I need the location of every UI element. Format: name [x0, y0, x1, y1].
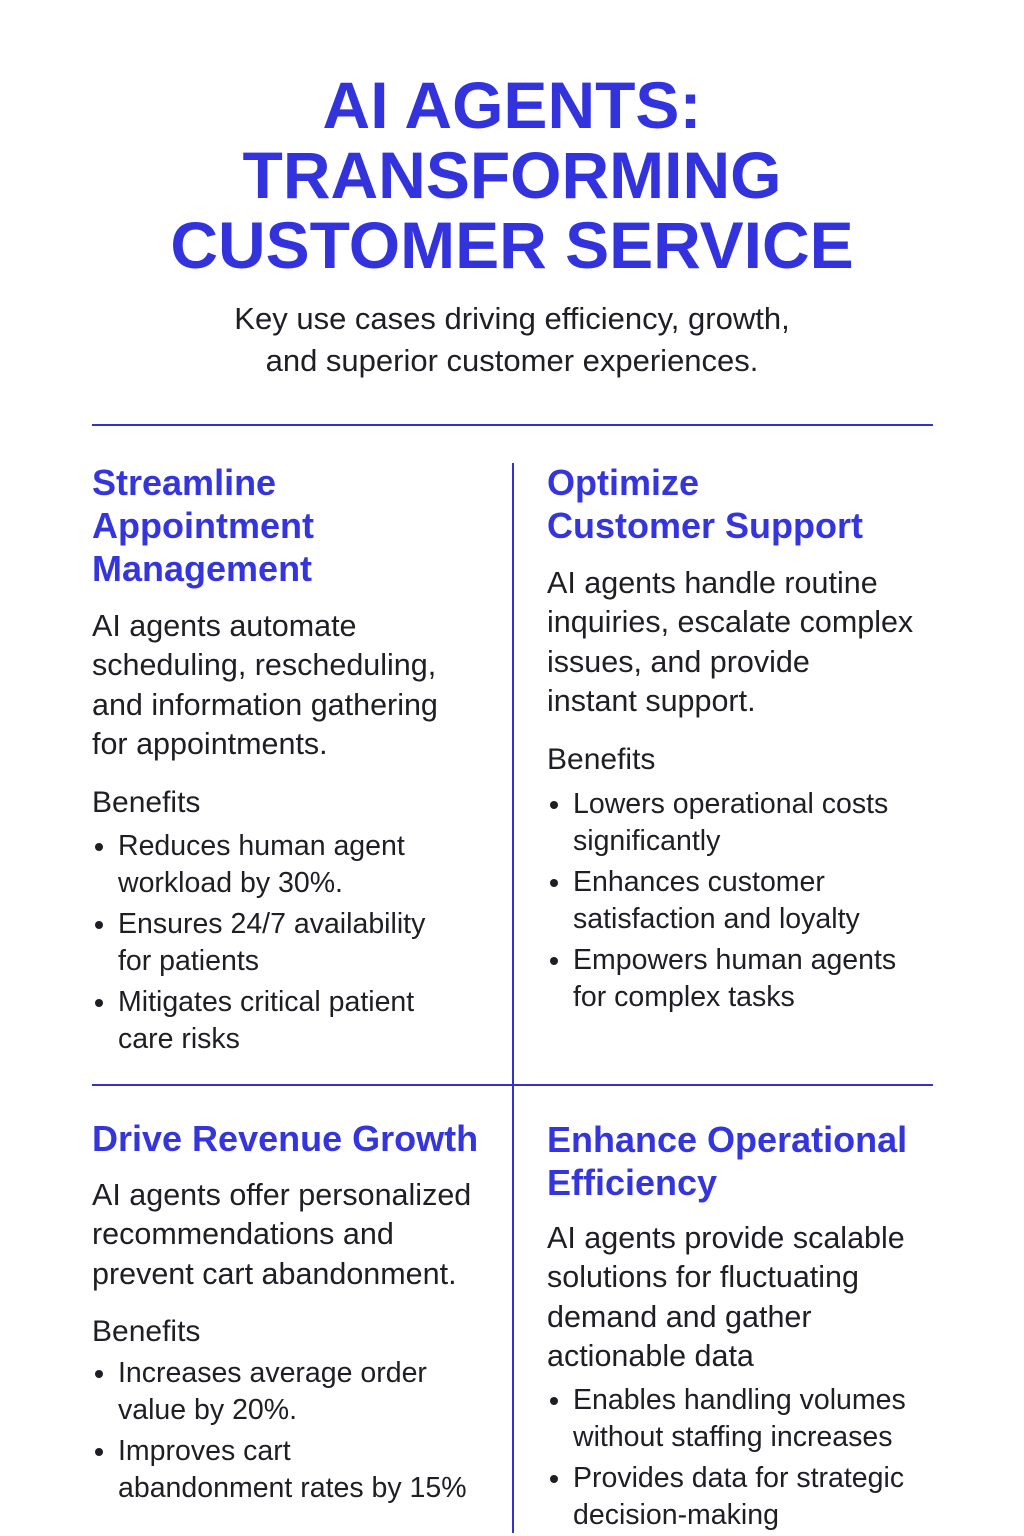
benefits list: Mitigates critical patient [118, 986, 414, 1018]
panel: operational efficiency [547, 1119, 907, 1530]
benefits list: decision-making [573, 1498, 779, 1530]
benefits list: Improves cart [118, 1435, 291, 1467]
subtitle: and superior customer experiences. [266, 343, 758, 378]
description: prevent cart abandonment. [92, 1257, 457, 1291]
heading: Management [92, 548, 312, 589]
heading [547, 462, 863, 546]
benefits list: Lowers operational costs [573, 788, 888, 820]
benefits list: value by 20%. [118, 1394, 297, 1426]
description: AI agents provide scalable [547, 1221, 905, 1255]
benefits list: for patients [118, 944, 259, 976]
heading: Customer Support [547, 505, 863, 546]
panel: appointment management [92, 462, 438, 1054]
benefits list: satisfaction and loyalty [573, 902, 860, 934]
benefits list: workload by 30%. [118, 866, 343, 898]
benefits list [95, 1357, 467, 1504]
benefits list: Empowers human agents [573, 944, 896, 976]
title [170, 68, 854, 282]
heading: Enhance Operational [547, 1119, 907, 1160]
description: inquiries, escalate complex [547, 605, 913, 639]
heading: Efficiency [547, 1162, 717, 1203]
description: and information gathering [92, 688, 438, 722]
benefits list: Reduces human agent [118, 830, 405, 862]
benefits label: Benefits [547, 743, 655, 776]
benefits list [550, 788, 896, 1012]
benefits list: Increases average order [118, 1357, 427, 1389]
heading: Drive Revenue Growth [92, 1118, 478, 1159]
subtitle: Key use cases driving efficiency, growth, [234, 301, 790, 336]
benefits list: care risks [118, 1022, 240, 1054]
description: AI agents handle routine [547, 566, 878, 600]
description: solutions for fluctuating [547, 1260, 859, 1294]
description [547, 566, 913, 718]
benefits list: Ensures 24/7 availability [118, 908, 425, 940]
subtitle [234, 301, 790, 378]
description [92, 1178, 471, 1291]
title: AI AGENTS: [323, 68, 701, 142]
panel: revenue growth [92, 1118, 478, 1504]
heading: Optimize [547, 462, 699, 503]
heading [547, 1119, 907, 1203]
heading: Streamline [92, 462, 276, 503]
benefits label: Benefits [92, 786, 200, 819]
description: instant support. [547, 684, 756, 718]
benefits list: Enhances customer [573, 866, 825, 898]
description: AI agents offer personalized [92, 1178, 471, 1212]
panel: customer support [547, 462, 913, 1012]
description [547, 1221, 905, 1373]
benefits list: Provides data for strategic [573, 1462, 904, 1494]
benefits list: significantly [573, 824, 720, 856]
benefits list: abandonment rates by 15% [118, 1472, 467, 1504]
description: for appointments. [92, 727, 328, 761]
benefits label: Benefits [92, 1315, 200, 1348]
description: issues, and provide [547, 645, 810, 679]
benefits list: for complex tasks [573, 980, 795, 1012]
benefits list [550, 1384, 906, 1530]
benefits list [95, 830, 426, 1054]
description: scheduling, rescheduling, [92, 648, 436, 682]
description: actionable data [547, 1339, 754, 1373]
title: TRANSFORMING [243, 138, 781, 212]
heading [92, 462, 314, 589]
description: demand and gather [547, 1300, 812, 1334]
benefits list: without staffing increases [573, 1420, 892, 1452]
description: recommendations and [92, 1217, 394, 1251]
benefits list: Enables handling volumes [573, 1384, 906, 1416]
heading: Appointment [92, 505, 314, 546]
description: AI agents automate [92, 609, 357, 643]
title: CUSTOMER SERVICE [170, 208, 854, 282]
description [92, 609, 438, 761]
